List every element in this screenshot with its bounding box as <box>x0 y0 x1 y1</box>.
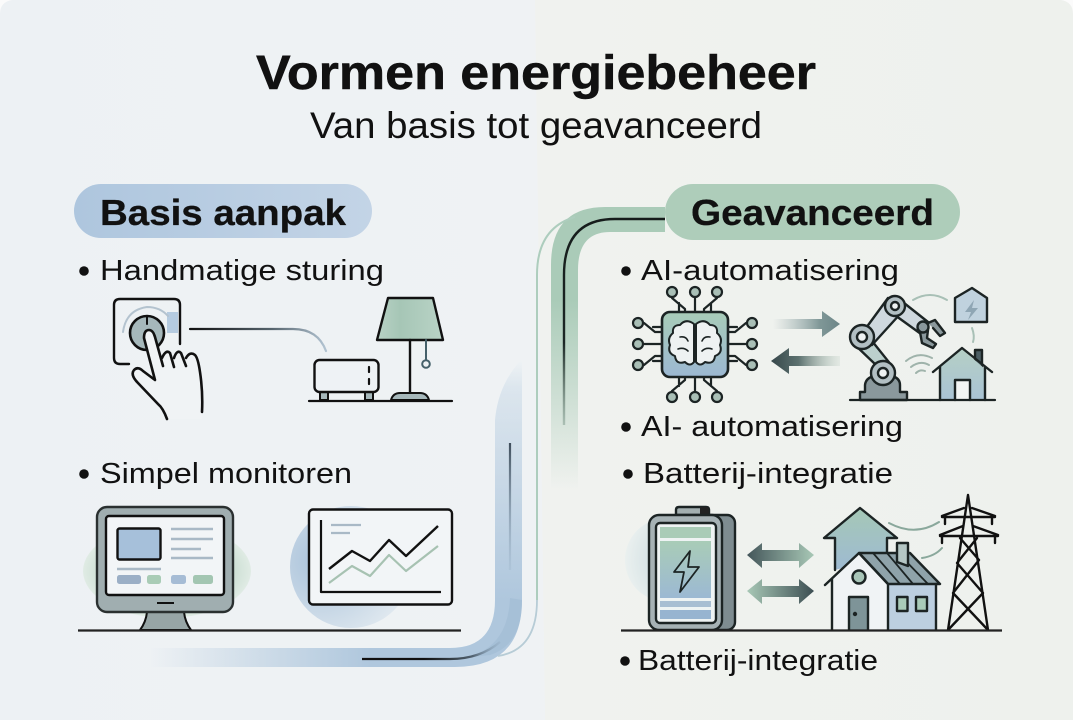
bullet: AI-automatisering: AI-automatisering <box>641 255 899 287</box>
icon: battery <box>625 507 735 630</box>
title: Vormen energiebeheer <box>256 47 816 100</box>
connector: blue band <box>150 360 522 667</box>
heading pill: basis aanpak <box>74 184 372 238</box>
arrow: double arrow top <box>747 543 814 568</box>
wire <box>190 329 326 351</box>
icon: AI chip with brain <box>633 287 757 402</box>
baseline left <box>78 629 461 632</box>
heading pill: geavanceerd: Geavanceerd <box>691 192 934 233</box>
bullet: simpel monitoren: Simpel monitoren <box>100 458 352 490</box>
icon: table lamp <box>377 298 443 400</box>
icon: device box <box>314 360 378 400</box>
baseline right <box>621 629 1002 632</box>
icon: wall switch <box>114 299 180 364</box>
icon: houses with solar roof <box>824 508 942 630</box>
arrow: robot to chip <box>771 348 840 374</box>
subtitle: Van basis tot geavanceerd <box>310 105 762 146</box>
arrow: chip to robot <box>773 311 840 337</box>
heading pill: geavanceerd <box>665 184 960 240</box>
home <box>933 348 992 400</box>
icon: pointing hand <box>133 330 202 419</box>
bullet: handmatige sturing: Handmatige sturing <box>100 255 384 287</box>
icon: robot arm and home <box>850 288 995 400</box>
line chart <box>290 506 452 628</box>
bullet: batterij-integratie repeated: Batterij-integratie <box>638 645 878 677</box>
icon: power pylon <box>940 495 998 630</box>
heading pill: basis aanpak: Basis aanpak <box>100 192 347 233</box>
arrow: double arrow bottom <box>747 579 814 604</box>
illustration: monitor <box>83 507 251 630</box>
small house with bolt <box>955 288 987 322</box>
bullet: batterij-integratie: Batterij-integratie <box>643 458 893 490</box>
illustration: switch, hand and lamp <box>114 298 452 419</box>
bullet: AI-automatisering repeated: AI- automatisering <box>641 411 903 443</box>
connector: green band <box>498 207 665 656</box>
